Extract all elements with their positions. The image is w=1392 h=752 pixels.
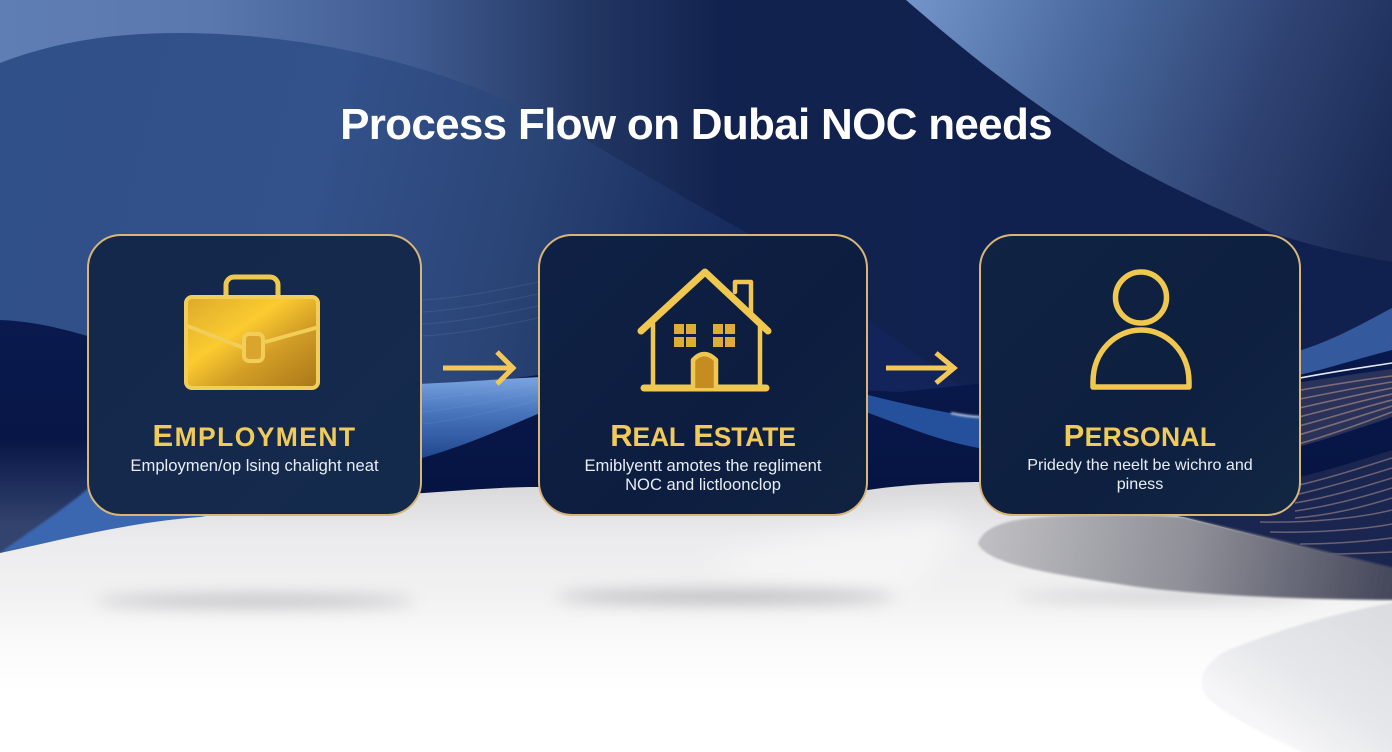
background: left arc (0, 33, 980, 420)
icon: person (1090, 269, 1192, 390)
description: employment: Employmen/op lsing chalight neat (130, 456, 379, 475)
background: blue highlight left (415, 377, 545, 460)
background: navy base (0, 0, 1392, 560)
background: fine lines between first cards (422, 282, 538, 424)
background: lower stripes right (1180, 450, 1392, 570)
description: personal: Pridedy the neelt be wichro and (1027, 456, 1253, 474)
icon: briefcase (184, 274, 320, 390)
background: card shadows (95, 591, 1315, 606)
background: grey blob bottom right (1202, 598, 1392, 752)
panel: personal (979, 234, 1301, 516)
background: upper stripes right (1295, 369, 1392, 448)
panel: real estate (538, 234, 868, 516)
description: real estate (584, 456, 822, 494)
background: blue wedge left (0, 478, 240, 553)
background: white floor (0, 482, 1392, 752)
background: grey shadow right (978, 515, 1392, 600)
description: personal (1027, 456, 1253, 493)
panel: employment (87, 234, 422, 516)
icon: house (638, 268, 772, 392)
description: real estate: NOC and lictloonclop (625, 475, 781, 494)
arrow: real estate to personal (886, 351, 958, 385)
background: soft highlight on floor (700, 512, 961, 590)
description: real estate: Emiblyentt amotes the regliment (584, 456, 822, 475)
heading: personal: PERSONAL (1064, 418, 1216, 453)
description: personal: piness (1117, 475, 1163, 493)
background: blue highlight centre (860, 393, 985, 449)
background: lower left haze (0, 440, 100, 560)
background: upper right sweep (906, 0, 1392, 262)
heading: real estate: REAL ESTATE (610, 418, 796, 453)
arrow: employment to real estate (443, 350, 516, 386)
background: blue band right (1295, 308, 1392, 376)
title: Process Flow on Dubai NOC needs (340, 100, 1052, 149)
heading: employment: EMPLOYMENT (152, 418, 356, 453)
background: lower dark wave (0, 320, 1392, 570)
